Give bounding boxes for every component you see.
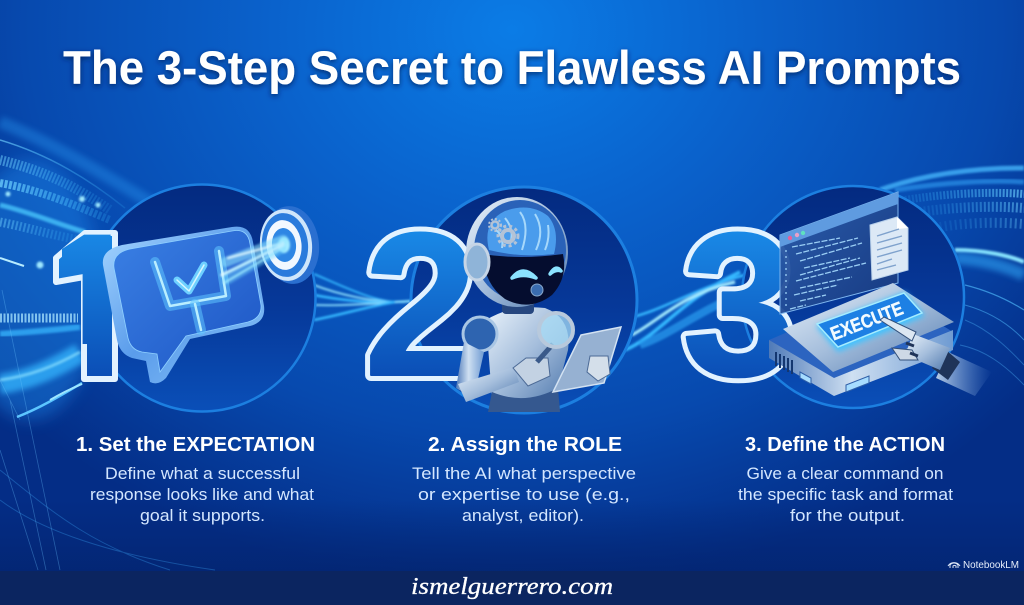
robot ear [465, 244, 489, 280]
robot forearm [458, 367, 519, 402]
illustration: execute console [769, 192, 992, 396]
lower background shade [0, 500, 1024, 572]
step 3 body: Give a clear command on [746, 464, 944, 483]
robot brain [487, 207, 556, 255]
console top [783, 283, 954, 372]
thumb [892, 348, 918, 360]
goal post check icon [155, 251, 226, 330]
step 3 text block [738, 434, 953, 525]
numeral 1 [53, 230, 118, 382]
icon: notebook waves [948, 563, 960, 568]
robot shoulder [463, 317, 497, 351]
step 3 body [738, 464, 953, 525]
window title bar [780, 192, 898, 247]
robot upper arm [456, 342, 484, 392]
wrist [932, 350, 960, 380]
left data streams [0, 122, 215, 570]
button label: EXECUTE [828, 298, 906, 345]
robot pointing arm [880, 317, 992, 396]
numeral 3: 3 [682, 191, 795, 419]
footer band [0, 571, 1024, 605]
illustration: robot with tablet [456, 197, 621, 412]
connector wave between circles 2 and 3 [625, 272, 745, 350]
step 2 body: or expertise to use (e.g., [418, 485, 630, 504]
console ports [800, 372, 869, 392]
numeral 2: 2 [364, 191, 477, 419]
right data streams [880, 168, 1024, 385]
robot helmet [466, 197, 568, 307]
robot neck [502, 298, 534, 314]
step 1 body: Define what a successful [105, 464, 300, 483]
execute button [816, 292, 925, 352]
document icon [870, 217, 908, 280]
robot mouth [531, 284, 543, 296]
code window [780, 192, 898, 314]
numeral 1: 1 [35, 191, 148, 419]
step 1 heading: 1. Set the EXPECTATION [76, 434, 315, 456]
numeral 2: 2 [364, 191, 477, 419]
pointing finger [880, 317, 916, 341]
robot hand and magnifier handle [513, 358, 550, 386]
step 1 text block [76, 434, 315, 525]
step 3 body: the specific task and format [738, 485, 953, 504]
step 1 body: response looks like and what [90, 485, 314, 504]
tablet [553, 327, 621, 392]
code lines [786, 238, 866, 309]
step 2 text block [412, 434, 636, 525]
step 1 body [90, 464, 314, 525]
forearm [936, 352, 992, 396]
console front side [769, 330, 953, 396]
numeral 3: 3 [682, 191, 795, 419]
robot face visor [482, 254, 564, 305]
step 1 circle [88, 184, 316, 412]
bubble face [114, 231, 261, 372]
robot waist [488, 388, 560, 412]
knuckle joints [906, 343, 918, 356]
window buttons [788, 231, 805, 240]
step 2 body: Tell the AI what perspective [412, 464, 636, 483]
step 2 body: analyst, editor). [462, 506, 584, 525]
robot eyes [512, 268, 561, 278]
step 3 circle [742, 186, 964, 408]
icon: target [256, 203, 323, 287]
bubble bevel [103, 227, 264, 383]
NotebookLM badge: NotebookLM [963, 560, 1019, 571]
light beam [222, 240, 283, 283]
console base [769, 290, 953, 396]
robot gears [489, 219, 518, 246]
step 2 heading: 2. Assign the ROLE [428, 434, 622, 456]
step 3 heading: 3. Define the ACTION [745, 434, 945, 456]
tablet hand [587, 356, 610, 381]
icon: speech bubble with goal check [103, 227, 264, 383]
step 3 body: for the output. [790, 506, 905, 525]
robot glass dome [474, 200, 566, 300]
step 2 body [412, 464, 636, 525]
magnifier [537, 313, 573, 362]
title: The 3-Step Secret to Flawless AI Prompts [63, 41, 961, 94]
connector wave between circles 1 and 2 [314, 270, 470, 320]
console vents [776, 352, 792, 374]
step 1 body: goal it supports. [140, 506, 265, 525]
robot torso [486, 307, 569, 402]
website footer text: ismelguerrero.com [411, 574, 613, 600]
palm [905, 334, 950, 370]
step 2 circle [411, 187, 637, 413]
